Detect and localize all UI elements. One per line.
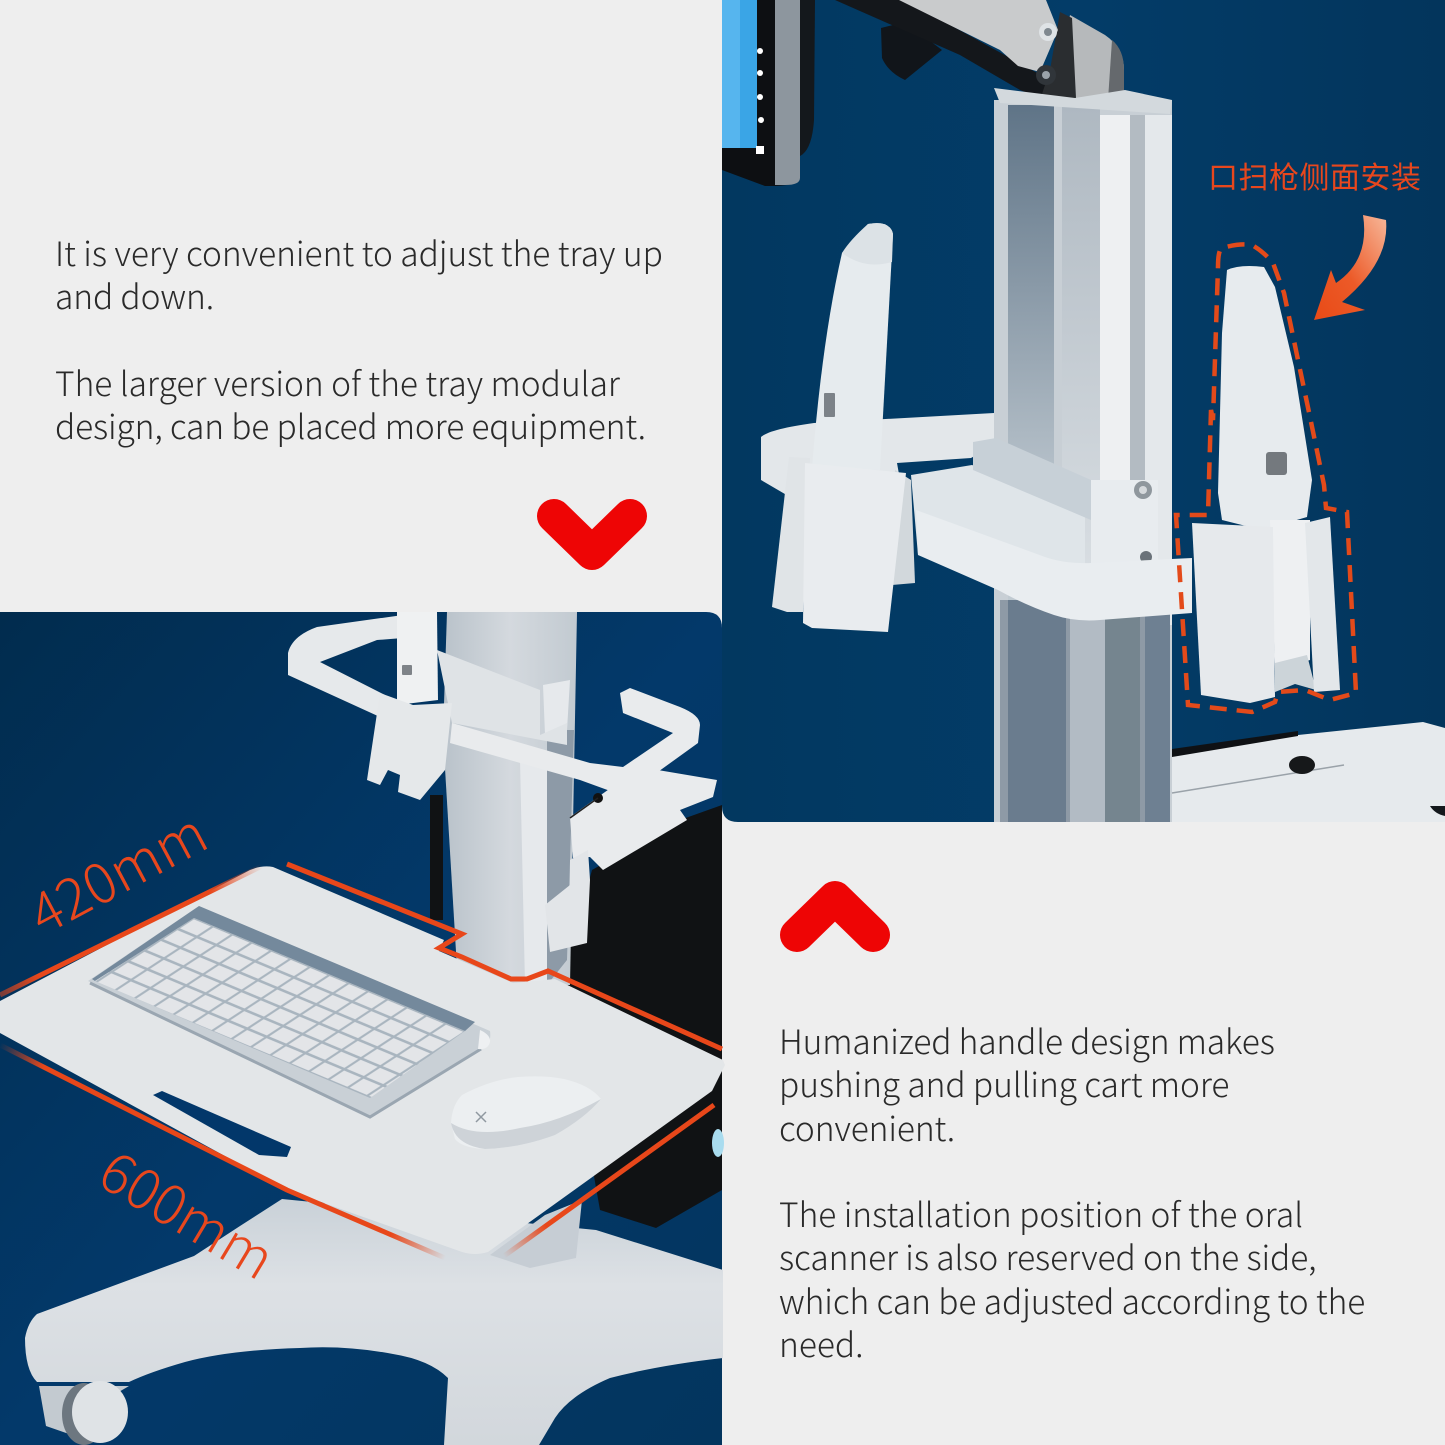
arrow: pointing to scanner <box>1314 215 1386 320</box>
text block: tray adjustment: design, can be placed more equipment. <box>55 400 646 449</box>
text block: handle and scanner: convenient. <box>779 1102 955 1151</box>
aluminium column <box>994 88 1172 822</box>
keyboard tray <box>0 866 725 1254</box>
monitor arm <box>835 0 1124 100</box>
upper bracket <box>288 612 717 952</box>
dimension: 420mm: 420mm <box>13 790 220 951</box>
pc box <box>430 795 722 1228</box>
monitor <box>722 0 815 186</box>
dimension: 600mm: 600mm <box>86 1128 292 1296</box>
text block: handle and scanner: need. <box>779 1318 864 1367</box>
right scanner <box>1192 266 1340 703</box>
tray outline dimensions <box>0 864 722 1258</box>
keyboard <box>88 906 490 1117</box>
text block: tray adjustment: The larger version of the tray modular <box>55 357 620 406</box>
icon: red chevron down <box>554 516 630 553</box>
text block: handle and scanner: Humanized handle design makes <box>779 1015 1275 1064</box>
panel: scanner mount photo <box>722 0 1445 822</box>
text block: handle and scanner: pushing and pulling cart more <box>779 1058 1229 1107</box>
text block: tray adjustment <box>55 227 663 449</box>
text block: handle and scanner: which can be adjusted according to the <box>779 1275 1365 1324</box>
stem under tray <box>490 1200 582 1268</box>
tray base <box>1172 722 1445 822</box>
text block: handle and scanner: scanner is also reserved on the side, <box>779 1231 1316 1280</box>
text block: handle and scanner <box>779 1015 1365 1367</box>
holder bracket <box>761 413 1192 620</box>
text block: tray adjustment: and down. <box>55 270 214 319</box>
panel: tray photo <box>0 612 725 1445</box>
text block: handle and scanner: The installation position of the oral <box>779 1188 1303 1237</box>
mouse <box>451 1076 601 1149</box>
text block: tray adjustment: It is very convenient to adjust the tray up <box>55 227 663 276</box>
left scanner <box>772 223 915 632</box>
scanner side installation label: 口扫枪侧面安装 <box>1208 153 1421 197</box>
icon: red chevron up <box>797 898 873 935</box>
handle slot <box>153 1091 291 1157</box>
status light on pc box <box>712 1129 724 1157</box>
dashed outline <box>1176 244 1356 712</box>
column <box>443 612 577 985</box>
caster wheel <box>39 1381 129 1445</box>
base <box>25 1199 723 1445</box>
